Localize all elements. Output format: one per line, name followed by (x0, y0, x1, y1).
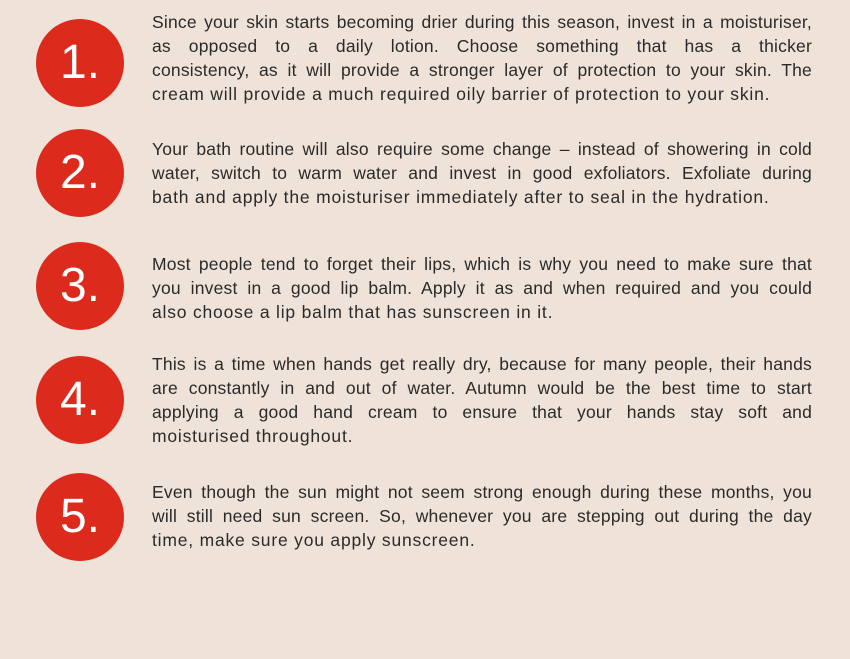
circle 2 (36, 129, 124, 217)
text 2: bath and apply the moisturiser immediately after to seal in the hydration. (152, 187, 770, 207)
text 1 (152, 12, 812, 104)
circle 1 (36, 19, 124, 107)
text 3: Most people tend to forget their lips, which is why you need to make sure that (152, 254, 812, 274)
text 5 (152, 482, 812, 550)
circle 2: 2. (60, 146, 100, 199)
circle 4 (36, 356, 124, 444)
circle 4: 4. (60, 373, 100, 426)
text 2: water, switch to warm water and invest in good exfoliators. Exfoliate during (152, 163, 812, 183)
text 3 (152, 254, 812, 322)
text 4: moisturised throughout. (152, 426, 353, 446)
text 2 (152, 139, 812, 207)
circle 3 (36, 242, 124, 330)
text 1: cream will provide a much required oily barrier of protection to your skin. (152, 84, 770, 104)
text 1: Since your skin starts becoming drier during this season, invest in a moisturiser, (152, 12, 812, 32)
circle 5: 5. (60, 490, 100, 543)
circle 1: 1. (60, 36, 100, 89)
text 4 (152, 354, 812, 446)
circle 5 (36, 473, 124, 561)
text 2: Your bath routine will also require some change – instead of showering in cold (152, 139, 812, 159)
text 5: time, make sure you apply sunscreen. (152, 530, 476, 550)
circle 3: 3. (60, 259, 100, 312)
text 4: are constantly in and out of water. Autumn would be the best time to start (152, 378, 812, 398)
text 1: consistency, as it will provide a stronger layer of protection to your skin. The (152, 60, 812, 80)
text 5: Even though the sun might not seem strong enough during these months, you (152, 482, 812, 502)
text 4: applying a good hand cream to ensure that your hands stay soft and (152, 402, 812, 422)
text 4: This is a time when hands get really dry, because for many people, their hands (152, 354, 812, 374)
text 3: also choose a lip balm that has sunscreen in it. (152, 302, 553, 322)
text 3: you invest in a good lip balm. Apply it as and when required and you could (152, 278, 812, 298)
text 5: will still need sun screen. So, whenever you are stepping out during the day (152, 506, 812, 526)
text 1: as opposed to a daily lotion. Choose something that has a thicker (152, 36, 812, 56)
